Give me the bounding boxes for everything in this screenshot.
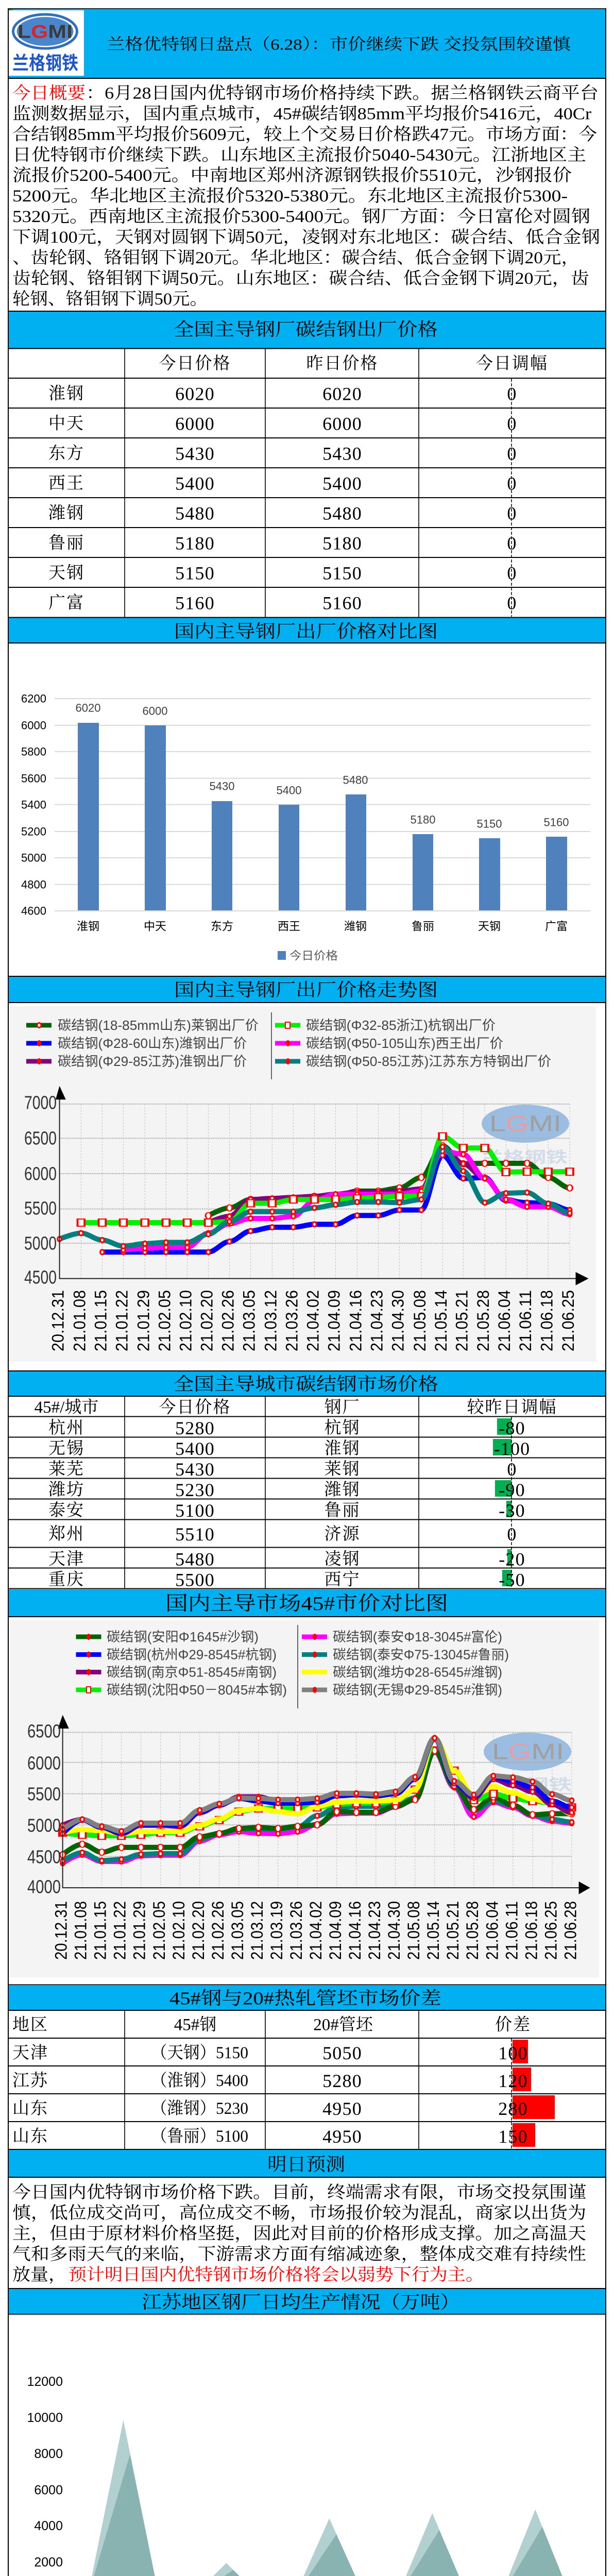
chart legend: 碳结钢(安阳Φ1645#沙钢) — [107, 1629, 259, 1645]
watermark logo: LGMI — [489, 1111, 561, 1137]
x axis date labels: 21.01.15 — [91, 1901, 110, 1960]
x axis date labels: 21.01.22 — [112, 1290, 131, 1351]
bar chart: mill prices: 潍钢 — [344, 920, 367, 933]
y axis labels: 5500 — [24, 1197, 57, 1219]
area chart: Jiangsu daily output — [9, 2315, 605, 2576]
table: city market price: 5510 — [175, 1524, 215, 1545]
x axis date labels: 21.06.11 — [516, 1290, 535, 1351]
table: city market price: 5480 — [175, 1549, 215, 1569]
y axis labels: 6500 — [27, 1721, 61, 1741]
table: price spread — [8, 2010, 606, 2149]
x axis date labels: 21.01.29 — [130, 1901, 149, 1960]
table: mill carbon steel price: 东方 — [48, 444, 84, 463]
header banner — [8, 9, 606, 79]
table: price spread: 100 — [498, 2043, 528, 2063]
x axis date labels: 21.06.04 — [483, 1901, 501, 1960]
x axis date labels: 21.02.05 — [155, 1290, 174, 1351]
table: city market price: 较昨日调幅 — [467, 1398, 557, 1417]
heading: mill price trend — [8, 976, 606, 1003]
y axis labels: 6000 — [24, 1163, 57, 1184]
table: city market price: 钢厂 — [325, 1398, 361, 1417]
x axis date labels: 20.12.31 — [49, 1290, 67, 1351]
table: mill carbon steel price: 今日调幅 — [476, 354, 548, 373]
table: price spread: 45#钢 — [174, 2015, 216, 2034]
x axis date labels: 21.03.26 — [287, 1901, 305, 1960]
text block: daily summary: 监测数据显示，国内重点城市，45#碳结钢85mm平均报价5416元，40Cr — [12, 104, 591, 124]
table: city market price: 西宁 — [325, 1570, 361, 1589]
text block: forecast: 放量， — [12, 2265, 66, 2284]
table: city market price: -20 — [499, 1549, 525, 1569]
table: city market price: 5230 — [175, 1480, 215, 1500]
table: city market price: 天津 — [48, 1550, 84, 1568]
table: price spread: 20#管坯 — [313, 2015, 373, 2034]
text block: forecast: 今日国内优特钢市场价格下跌。目前，终端需求有限，市场交投氛围谨 — [12, 2183, 586, 2202]
y axis labels: 4500 — [24, 1266, 57, 1288]
table: mill carbon steel price: 广富 — [48, 594, 84, 612]
table: mill carbon steel price: 5180 — [322, 533, 362, 553]
bar chart: mill prices: 5400 — [21, 799, 46, 811]
table: price spread: （淮钢）5400 — [151, 2071, 248, 2090]
x axis date labels: 21.06.25 — [541, 1901, 560, 1960]
bar chart: mill prices: 5200 — [21, 825, 46, 838]
table: city market price: 杭钢 — [325, 1418, 361, 1437]
x axis date labels: 21.04.23 — [367, 1290, 386, 1351]
table: mill carbon steel price: 5480 — [322, 503, 362, 523]
y axis labels: 5000 — [27, 1815, 61, 1836]
x axis date labels: 21.05.08 — [411, 1290, 429, 1351]
table: city market price: 潍坊 — [48, 1481, 84, 1499]
table: mill carbon steel price: 5160 — [175, 592, 215, 613]
bar chart: mill prices: 西王 — [278, 920, 300, 933]
chart legend: 今日价格 — [289, 949, 338, 962]
x axis date labels: 20.12.31 — [52, 1901, 71, 1960]
table: city market price: 杭州 — [48, 1418, 84, 1437]
table: price spread: 150 — [498, 2126, 528, 2147]
x axis date labels: 21.05.21 — [452, 1290, 471, 1351]
watermark logo: LGMI — [492, 1739, 564, 1764]
table: mill carbon steel price: 0 — [507, 443, 517, 464]
table: mill carbon steel price: 0 — [507, 592, 517, 613]
x axis date labels: 21.03.19 — [267, 1901, 286, 1960]
table: city market price: 5280 — [175, 1418, 215, 1438]
x axis date labels: 21.01.08 — [72, 1901, 90, 1960]
table: mill carbon steel price: 淮钢 — [48, 384, 84, 403]
table: city market price — [8, 1396, 606, 1590]
table: city market price: 5500 — [175, 1569, 215, 1590]
x axis date labels: 21.03.05 — [240, 1290, 259, 1351]
text block: daily summary: 轮钢、铬钼钢下调50元。 — [12, 290, 208, 309]
heading: 45# market price comparison: 国内主导市场45#市价对比图 — [165, 1593, 448, 1615]
table: price spread: 120 — [498, 2071, 528, 2091]
table: city market price: 5100 — [175, 1500, 215, 1521]
text block: daily summary: 下调100元，天钢对圆钢下调50元，凌钢对东北地区：碳合结、低合金钢 — [12, 228, 600, 247]
text block: forecast: 气和多雨天气的来临，下游需求方面有缩减迹象，整体成交难有持续性 — [12, 2245, 586, 2264]
heading: tomorrow forecast — [8, 2150, 606, 2178]
plot area and series — [58, 1715, 590, 1894]
chart legend: 碳结钢(泰安Φ18-3045#富伦) — [333, 1629, 502, 1645]
chart legend — [76, 1625, 509, 1708]
change bars — [493, 1418, 511, 1586]
x axis date labels: 21.06.18 — [522, 1901, 540, 1960]
bar chart: mill prices: 5800 — [21, 745, 46, 758]
plot area and series — [56, 1086, 589, 1285]
chart legend: 碳结钢(潍坊Φ28-6545#潍钢) — [333, 1664, 502, 1680]
x axis date labels: 21.04.16 — [346, 1290, 365, 1351]
table: mill carbon steel price: 0 — [507, 383, 517, 404]
x axis date labels: 21.05.28 — [474, 1290, 492, 1351]
x axis date labels — [49, 1290, 577, 1351]
area chart: Jiangsu daily output: 10000 — [27, 2411, 63, 2425]
heading: 45# market price comparison — [8, 1589, 606, 1617]
watermark logo — [482, 1105, 569, 1166]
x axis date labels: 21.01.08 — [70, 1290, 89, 1351]
table: mill carbon steel price: 5430 — [322, 443, 362, 464]
table: mill carbon steel price: 5430 — [175, 443, 215, 464]
bar chart: mill prices: 6200 — [21, 692, 46, 705]
chart legend: 碳结钢(泰安Φ75-13045#鲁丽) — [333, 1647, 509, 1662]
x axis date labels: 21.04.09 — [326, 1901, 345, 1960]
table: mill carbon steel price: 西王 — [48, 474, 84, 493]
bar chart: mill prices: 鲁丽 — [412, 920, 434, 933]
y axis labels: 5500 — [27, 1784, 61, 1804]
heading: mill price comparison: 国内主导钢厂出厂价格对比图 — [174, 621, 438, 642]
table: price spread: 5050 — [322, 2043, 362, 2063]
spread bars — [513, 2040, 555, 2147]
table: mill carbon steel price: 潍钢 — [48, 504, 84, 522]
table: mill carbon steel price: 6020 — [322, 383, 362, 404]
table: mill carbon steel price: 5480 — [175, 503, 215, 523]
x axis date labels: 21.02.20 — [197, 1290, 216, 1351]
line chart panel: 45# market prices — [9, 1620, 599, 1977]
bar chart: mill prices: 5480 — [343, 774, 368, 786]
chart legend: 碳结钢(Φ50-105山东)西王出厂价 — [306, 1036, 503, 1051]
table: city market price: 45#/城市 — [35, 1398, 98, 1417]
table: price spread: 山东 — [12, 2099, 48, 2118]
table: mill carbon steel price: 0 — [507, 473, 517, 494]
chart legend: 碳结钢(南京Φ51-8545#南钢) — [107, 1664, 277, 1680]
y axis labels: 4000 — [27, 1876, 61, 1897]
table: mill carbon steel price: 鲁丽 — [48, 534, 84, 552]
area chart: Jiangsu daily output: 12000 — [27, 2375, 63, 2389]
heading: 45# vs 20# spread — [8, 1985, 606, 2010]
x axis date labels: 21.05.21 — [444, 1901, 462, 1960]
area chart: Jiangsu daily output: 2000 — [34, 2555, 63, 2570]
table: price spread: 山东 — [12, 2127, 48, 2146]
heading: Jiangsu mill output: 江苏地区钢厂日均生产情况（万吨） — [142, 2293, 460, 2312]
table: mill carbon steel price: 6020 — [175, 383, 215, 404]
table: mill carbon steel price: 今日价格 — [159, 354, 231, 373]
x axis date labels: 21.06.04 — [495, 1290, 514, 1351]
heading: Jiangsu mill output — [8, 2288, 606, 2315]
logo: LGMI — [18, 21, 73, 42]
table: city market price: 济源 — [325, 1524, 361, 1544]
heading: mill carbon steel price — [8, 311, 606, 348]
text block: daily summary: 日优特钢市价继续下跌。山东地区主流报价5040-5430元。江浙地区主 — [12, 145, 586, 165]
x axis date labels: 21.02.26 — [218, 1290, 237, 1351]
table: mill carbon steel price — [8, 348, 606, 617]
table: mill carbon steel price: 0 — [507, 503, 517, 523]
bar chart: mill prices: 东方 — [211, 920, 233, 933]
table: city market price: -90 — [499, 1480, 525, 1500]
table: city market price: 5430 — [175, 1459, 215, 1480]
x axis date labels: 21.04.02 — [303, 1290, 322, 1351]
table: mill carbon steel price: 5400 — [322, 473, 362, 494]
x axis date labels: 21.02.10 — [176, 1290, 195, 1351]
chart legend: 碳结钢(杭州Φ29-8545#杭钢) — [107, 1647, 277, 1662]
text block: daily summary: 5320元。西南地区主流报价5300-5400元。钢厂方面：今日富伦对圆钢 — [12, 207, 590, 226]
text block: daily summary: 5200元。华北地区主流报价5320-5380元。东北地区主流报价5300- — [12, 187, 568, 206]
x axis date labels: 21.06.28 — [561, 1901, 579, 1960]
x axis date labels: 21.03.12 — [248, 1901, 266, 1960]
text block: forecast — [12, 2183, 586, 2284]
heading: mill price comparison — [8, 618, 606, 643]
x axis date labels: 21.04.02 — [306, 1901, 325, 1960]
y axis labels — [24, 1092, 57, 1288]
table: city market price: -30 — [499, 1500, 525, 1521]
logo — [9, 10, 84, 76]
table: mill carbon steel price: 昨日价格 — [306, 354, 378, 373]
watermark logo: 钢铁 — [525, 1776, 572, 1794]
table: mill carbon steel price: 0 — [507, 533, 517, 553]
table: city market price: 莱芜 — [48, 1460, 84, 1479]
x axis date labels: 21.02.26 — [209, 1901, 227, 1960]
bar chart: mill prices: 5160 — [544, 816, 569, 828]
table: city market price: 无锡 — [48, 1439, 84, 1458]
table: price spread: 价差 — [495, 2015, 531, 2034]
bar chart: mill prices: 4800 — [21, 878, 46, 891]
x axis date labels: 21.02.10 — [169, 1901, 188, 1960]
x axis date labels: 21.04.30 — [388, 1290, 407, 1351]
x axis date labels: 21.04.16 — [346, 1901, 364, 1960]
text block: daily summary: 流报价5200-5400元。中南地区郑州济源钢铁报价5510元，沙钢报价 — [12, 166, 572, 185]
y axis labels: 6500 — [24, 1127, 57, 1149]
table: price spread: （潍钢）5230 — [151, 2099, 248, 2118]
text block: daily summary: 、齿轮钢、铬钼钢下调20元。华北地区：碳合结、低合金钢下调20元， — [12, 248, 579, 267]
x axis date labels: 21.06.25 — [559, 1290, 577, 1351]
bar chart: mill prices: 天钢 — [478, 920, 501, 933]
table: price spread: （天钢）5150 — [151, 2043, 248, 2062]
table: mill carbon steel price: 0 — [507, 563, 517, 583]
text block: daily summary — [12, 83, 600, 309]
watermark logo — [484, 1733, 572, 1794]
chart legend: 碳结钢(无锡Φ29-8545#淮钢) — [333, 1682, 502, 1698]
y axis labels — [27, 1721, 61, 1897]
heading: city market price — [8, 1370, 606, 1396]
text block: daily summary: 合结钢85mm平均报价5609元，较上个交易日价格跌47元。市场方面：今 — [12, 125, 597, 144]
table: mill carbon steel price: 天钢 — [48, 564, 84, 582]
bar chart: mill prices: 中天 — [144, 920, 166, 933]
y axis labels: 6000 — [27, 1753, 61, 1773]
table: city market price: 淮钢 — [325, 1439, 361, 1458]
x axis date labels: 21.06.11 — [502, 1901, 521, 1960]
x axis date labels: 21.01.22 — [111, 1901, 129, 1960]
text block: daily summary: ：6月28日国内优特钢市场价格持续下跌。据兰格钢铁云商平台 — [86, 83, 599, 103]
bar chart: mill prices: 6000 — [143, 705, 167, 717]
chart legend: 碳结钢(18-85mm山东)莱钢出厂价 — [58, 1018, 259, 1033]
text block: forecast: 主，但由于原材料价格坚挺，因此对目前的价格形成支撑。加之高温天 — [12, 2224, 586, 2243]
table: city market price: 今日价格 — [159, 1398, 231, 1417]
text block: forecast: 预计明日国内优特钢市场价格将会以弱势下行为主。 — [69, 2265, 484, 2284]
x axis date labels: 21.04.09 — [325, 1290, 343, 1351]
x axis date labels: 21.05.14 — [424, 1901, 442, 1960]
y axis labels: 4500 — [27, 1846, 61, 1867]
table: mill carbon steel price: 5400 — [175, 473, 215, 494]
logo: 兰格钢铁 — [12, 53, 78, 73]
bar chart: mill prices: 6000 — [21, 719, 46, 732]
heading: 45# vs 20# spread: 45#钢与20#热轧管坯市场价差 — [169, 1989, 441, 2008]
bar chart: mill prices: 6020 — [76, 702, 100, 714]
x axis date labels — [52, 1901, 579, 1960]
table: city market price: 0 — [507, 1524, 517, 1545]
x axis date labels: 21.03.05 — [228, 1901, 247, 1960]
heading: city market price: 全国主导城市碳结钢市场价格 — [174, 1375, 438, 1394]
table: mill carbon steel price: 6000 — [322, 413, 362, 434]
x axis date labels: 21.04.23 — [365, 1901, 384, 1960]
x axis date labels: 21.02.20 — [189, 1901, 208, 1960]
bar chart: mill prices: 5400 — [277, 784, 301, 796]
table: mill carbon steel price: 0 — [507, 413, 517, 434]
x axis date labels: 21.01.15 — [91, 1290, 110, 1351]
table: mill carbon steel price: 中天 — [48, 414, 84, 433]
chart legend: 碳结钢(Φ32-85浙江)杭钢出厂价 — [306, 1018, 496, 1033]
table: city market price: 鲁丽 — [325, 1501, 361, 1520]
table: price spread: 5280 — [322, 2071, 362, 2091]
table: price spread: 4950 — [322, 2098, 362, 2119]
table: city market price: 莱钢 — [325, 1460, 361, 1479]
table: city market price: -100 — [494, 1438, 530, 1459]
table: mill carbon steel price: 5180 — [175, 533, 215, 553]
chart legend: 碳结钢(Φ29-85江苏)淮钢出厂价 — [58, 1054, 247, 1069]
table: mill carbon steel price: 6000 — [175, 413, 215, 434]
chart legend: 碳结钢(沈阳Φ50－8045#本钢) — [107, 1682, 287, 1698]
bar chart: mill prices: 4600 — [21, 905, 46, 917]
table: city market price: 潍钢 — [325, 1480, 361, 1499]
heading: mill carbon steel price: 全国主导钢厂碳结钢出厂价格 — [174, 319, 438, 340]
table: city market price: 郑州 — [48, 1524, 84, 1544]
bar chart: mill prices: 淮钢 — [77, 920, 99, 933]
bar chart: mill prices: 5000 — [21, 851, 46, 865]
bar chart: mill prices: 5180 — [411, 813, 435, 826]
chart legend — [26, 1012, 551, 1079]
table: city market price: -80 — [499, 1418, 525, 1438]
table: city market price: 0 — [507, 1459, 517, 1480]
area chart: Jiangsu daily output: 8000 — [34, 2447, 63, 2461]
x axis date labels: 21.05.14 — [432, 1290, 450, 1351]
x axis date labels: 21.01.29 — [134, 1290, 152, 1351]
table: price spread: 天津 — [12, 2043, 48, 2062]
heading: tomorrow forecast: 明日预测 — [267, 2155, 345, 2175]
table: mill carbon steel price: 5160 — [322, 592, 362, 613]
table: city market price: -50 — [499, 1569, 525, 1590]
chart legend: 碳结钢(Φ28-60山东)潍钢出厂价 — [58, 1036, 247, 1051]
report title: 兰格优特钢日盘点（6.28）：市价继续下跌 交投氛围较谨慎 — [107, 35, 572, 54]
x axis date labels: 21.04.30 — [385, 1901, 403, 1960]
x axis date labels: 21.06.18 — [537, 1290, 556, 1351]
table: price spread: 280 — [498, 2098, 528, 2119]
table: price spread: 地区 — [12, 2015, 48, 2034]
table: price spread: 4950 — [322, 2126, 362, 2147]
text block: daily summary: 今日概要 — [12, 83, 86, 103]
bar chart: mill prices: 广富 — [545, 920, 568, 933]
bar chart: mill prices — [21, 692, 590, 962]
watermark logo: 兰格钢铁 — [482, 1149, 568, 1166]
table: price spread: （鲁丽）5100 — [151, 2127, 248, 2146]
y axis labels: 7000 — [24, 1092, 57, 1113]
heading: mill price trend: 国内主导钢厂出厂价格走势图 — [174, 980, 438, 1001]
chart legend: 碳结钢(Φ50-85江苏)江苏东方特钢出厂价 — [306, 1054, 551, 1069]
area chart: Jiangsu daily output: 6000 — [34, 2483, 63, 2498]
bar chart: mill prices: 5600 — [21, 772, 46, 785]
text block: forecast: 慎，低位成交尚可，高位成交不畅，市场报价较为混乱，商家以出货为 — [12, 2204, 586, 2223]
x axis date labels: 21.03.12 — [261, 1290, 280, 1351]
table: mill carbon steel price: 5150 — [175, 563, 215, 583]
x axis date labels: 21.05.28 — [463, 1901, 482, 1960]
x axis date labels: 21.02.05 — [150, 1901, 168, 1960]
bar chart: mill prices: 5150 — [477, 817, 502, 831]
table: city market price: 泰安 — [48, 1501, 84, 1520]
table: city market price: 凌钢 — [325, 1550, 361, 1568]
table: city market price: 重庆 — [48, 1570, 84, 1589]
x axis date labels: 21.05.08 — [404, 1901, 423, 1960]
table: mill carbon steel price: 5150 — [322, 563, 362, 583]
table: city market price: 5400 — [175, 1438, 215, 1459]
text block: daily summary: 齿轮钢、铬钼钢下调50元。山东地区：碳合结、低合金钢下调20元，齿 — [12, 269, 589, 288]
table: price spread: 江苏 — [12, 2071, 48, 2090]
y axis labels: 5000 — [24, 1232, 57, 1254]
bar chart: mill prices: 5430 — [210, 780, 234, 792]
line chart panel: mill price trend — [9, 1006, 596, 1362]
area chart: Jiangsu daily output: 4000 — [34, 2519, 63, 2533]
x axis date labels: 21.03.26 — [282, 1290, 301, 1351]
